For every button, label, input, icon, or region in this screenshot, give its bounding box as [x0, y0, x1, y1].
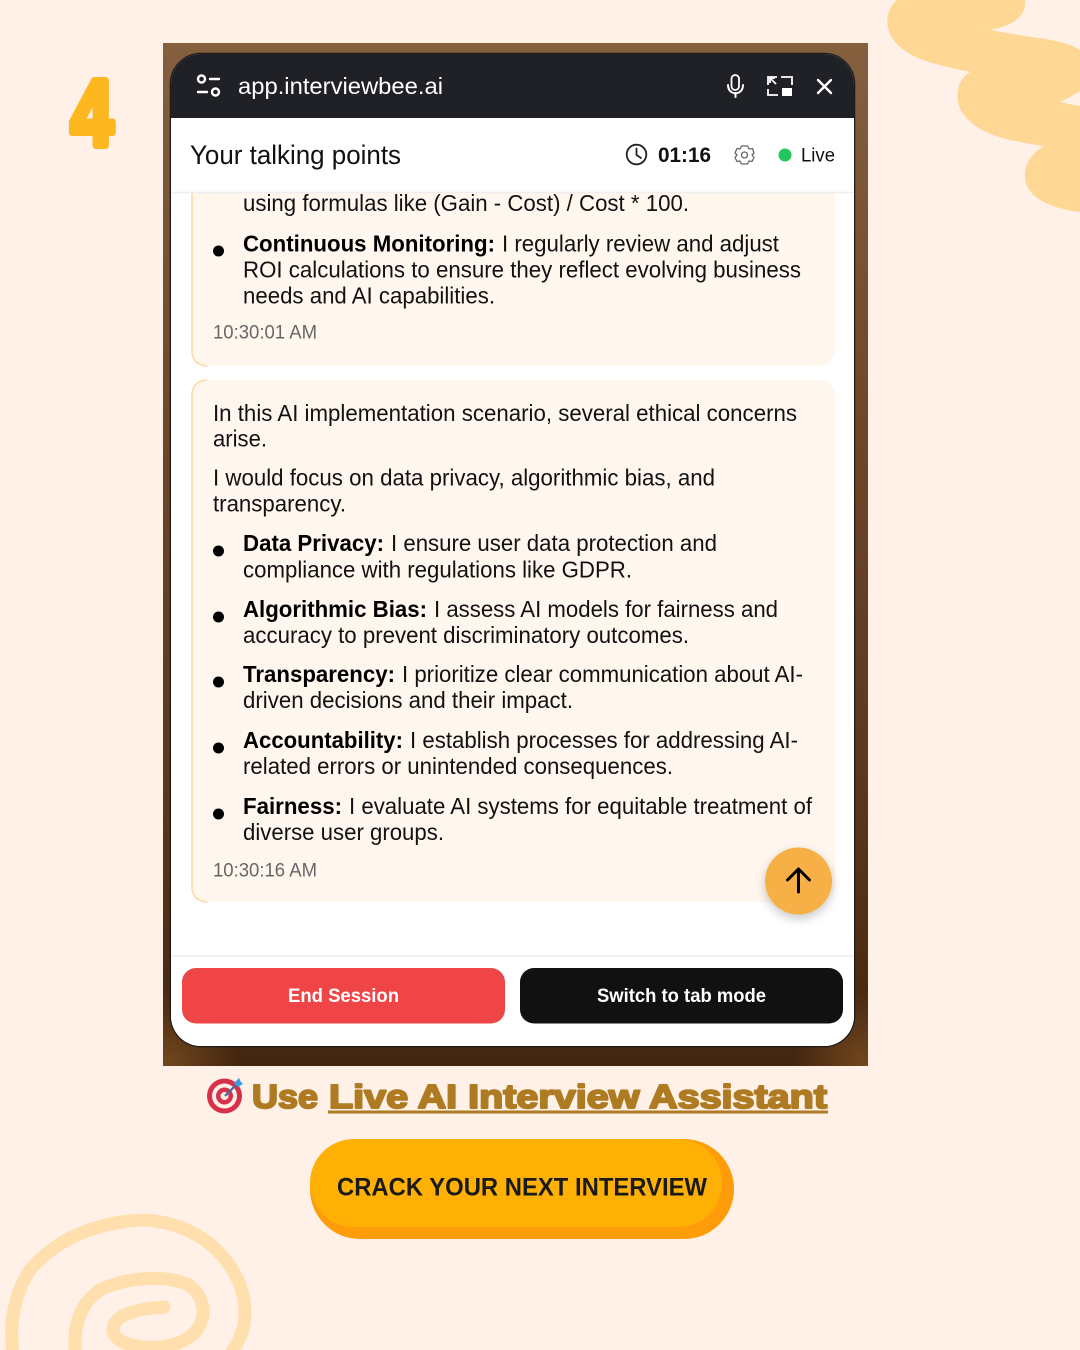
browser title bar	[171, 54, 854, 118]
talking point card 1: needs and AI capabilities.	[243, 282, 495, 308]
talking point card 2: arise.	[213, 426, 267, 452]
talking point card 2: compliance with regulations like GDPR.	[243, 556, 632, 582]
talking point card 2: Accountability:	[243, 727, 403, 753]
icon: target with dart	[207, 1078, 243, 1114]
talking point card 2: I would focus on data privacy, algorithmic bias, and	[213, 464, 715, 490]
talking point card 2: I prioritize clear communication about AI-	[402, 661, 803, 687]
headline	[207, 1078, 828, 1116]
browser title bar: app.interviewbee.ai	[238, 73, 443, 99]
call to action button	[310, 1139, 734, 1239]
talking point card 1: ROI calculations to ensure they reflect evolving business	[243, 256, 801, 282]
talking point card 1: Continuous Monitoring:	[243, 230, 495, 256]
talking point card 2: related errors or unintended consequences.	[243, 753, 673, 779]
talking point card 2: In this AI implementation scenario, several ethical concerns	[213, 400, 797, 426]
headline: Live AI Interview Assistant	[329, 1079, 827, 1116]
talking point card 2: Fairness:	[243, 793, 342, 819]
talking points header: 01:16	[658, 143, 711, 167]
talking point card 2: I evaluate AI systems for equitable treatment of	[349, 793, 813, 819]
footer action bar	[171, 956, 854, 1046]
talking point card 2: I assess AI models for fairness and	[434, 596, 778, 622]
footer action bar: End Session	[288, 986, 399, 1007]
talking point card 1: 10:30:01 AM	[213, 322, 317, 344]
talking point card 2: transparency.	[213, 490, 346, 516]
talking point card 2: diverse user groups.	[243, 819, 444, 845]
step number 4: 4	[71, 61, 113, 165]
talking points header: Live	[801, 146, 835, 166]
talking point card 2: 10:30:16 AM	[213, 860, 317, 882]
headline: Use	[252, 1079, 318, 1116]
talking point card 2: Data Privacy:	[243, 530, 384, 556]
talking point card 2: I establish processes for addressing AI-	[410, 727, 798, 753]
footer action bar: Switch to tab mode	[597, 986, 766, 1007]
app window	[171, 54, 854, 1046]
call to action button: CRACK YOUR NEXT INTERVIEW	[337, 1174, 707, 1202]
talking point card 2: I ensure user data protection and	[391, 530, 717, 556]
talking point card 2: Algorithmic Bias:	[243, 596, 427, 622]
talking point card 1: I regularly review and adjust	[502, 230, 780, 256]
decorative blob: top right	[887, 0, 1080, 212]
scroll to top button	[765, 848, 832, 914]
talking points header: Your talking points	[190, 140, 401, 170]
talking point card 2: Transparency:	[243, 661, 395, 687]
talking points header	[171, 144, 854, 194]
decorative spiral: bottom left	[12, 1220, 245, 1350]
talking point card 2	[191, 380, 835, 902]
talking point card 2: accuracy to prevent discriminatory outcomes.	[243, 622, 689, 648]
talking point card 1: using formulas like (Gain - Cost) / Cost * 100.	[243, 190, 689, 216]
talking point card 2: driven decisions and their impact.	[243, 687, 573, 713]
talking point card 1	[191, 193, 835, 367]
screenshot frame	[163, 43, 868, 1066]
